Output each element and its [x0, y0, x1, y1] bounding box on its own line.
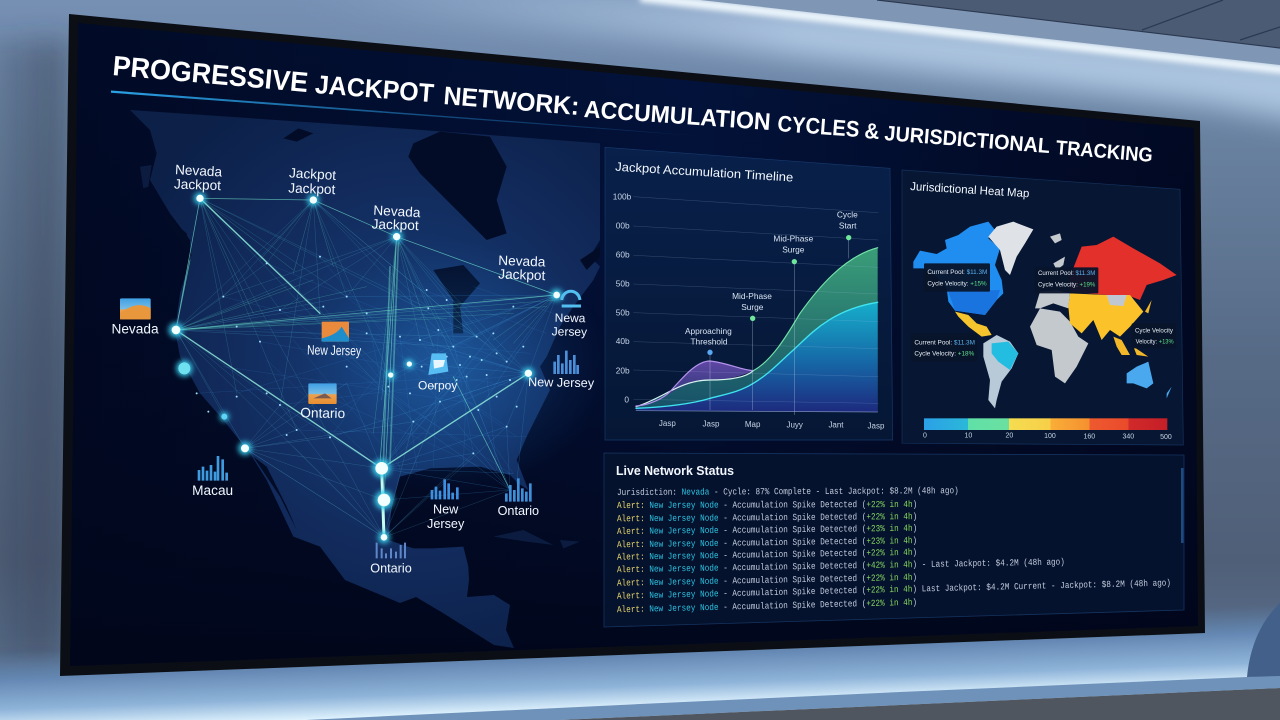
timeline x axis labels: Map: [745, 420, 761, 429]
map labels: Jersey: [427, 517, 465, 531]
tooltip: europe: Cycle Velocity: +19%: [1038, 282, 1095, 289]
tooltip: europe: Current Pool: $11.3M: [1038, 270, 1095, 277]
shelf ledge: [306, 675, 1280, 720]
timeline annotations: Surge: [782, 245, 805, 255]
timeline y axis labels: 20b: [616, 365, 630, 375]
status log lines: Jurisdiction: Nevada - Cycle: 87% Complete - Last Jackpot: $8.2M (48h ago): [617, 486, 959, 498]
map landmass: [130, 110, 600, 648]
panel: jurisdictional heat map: [902, 170, 1183, 445]
ceiling with panel seams: [700, 0, 1280, 65]
map labels: Newa: [555, 311, 586, 325]
map labels: Jersey: [552, 324, 587, 339]
map labels: Nevada: [111, 321, 159, 336]
tooltip: north america: [924, 263, 990, 292]
timeline y axis labels: 60b: [616, 250, 630, 260]
timeline annotations: Mid-Phase: [773, 234, 814, 244]
heat map legend labels: [923, 432, 1172, 441]
timeline annotations: Threshold: [690, 336, 728, 346]
title: &: [864, 118, 880, 144]
network connections: [176, 198, 557, 537]
map labels: New: [433, 502, 459, 516]
title: TRACKING: [1055, 137, 1154, 167]
status log lines: Alert: New Jersey Node - Accumulation Spike Detected (+23% in 4h): [617, 535, 917, 551]
tooltip: north america: Current Pool: $11.3M: [927, 269, 987, 276]
status scrollbar: [1181, 468, 1184, 543]
timeline areas: [636, 248, 878, 412]
status log lines: Alert: New Jersey Node - Accumulation Spike Detected (+22% in 4h) Last Jackpot: $4.2M Current - Jackpot: $8.2M (48h ago): [617, 578, 1171, 602]
status log lines: Alert: New Jersey Node - Accumulation Spike Detected (+23% in 4h): [617, 523, 917, 537]
timeline y axis labels: 40b: [616, 336, 630, 346]
timeline x axis labels: Jant: [828, 421, 844, 430]
screen background: [70, 23, 1198, 666]
timeline annotations: [685, 209, 858, 346]
heat map legend labels: 500: [1160, 434, 1172, 441]
heat map heading: Jurisdictional Heat Map: [910, 180, 1030, 200]
timeline y axis labels: 00b: [616, 221, 630, 231]
timeline gridlines: [633, 197, 878, 403]
network nodes: [169, 192, 563, 543]
status log lines: Alert: New Jersey Node - Accumulation Spike Detected (+42% in 4h) - Last Jackpot: $4.2M (48h ago): [617, 557, 1065, 576]
network small dots: [197, 257, 523, 453]
icon: bar chart New Jersey south: [432, 479, 457, 499]
icon: Ontario landscape: [308, 383, 337, 404]
tooltip: asia: Cycle Velocity: [1135, 328, 1174, 335]
heat map legend labels: 20: [1005, 433, 1013, 440]
timeline y axis labels: 50b: [616, 278, 630, 288]
status log lines: Alert: New Jersey Node - Accumulation Spike Detected (+22% in 4h): [617, 597, 917, 616]
icon: arch: [562, 291, 581, 306]
panel: network map: [111, 110, 607, 648]
map labels: Nevada: [175, 162, 223, 180]
title: [111, 50, 1154, 167]
title: PROGRESSIVE: [111, 50, 309, 98]
timeline curves: [636, 248, 878, 412]
tooltip: south america: [911, 333, 977, 362]
timeline annotations: Cycle: [837, 209, 858, 219]
tooltip: north america: Cycle Velocity: +15%: [927, 280, 987, 287]
timeline heading: Jackpot Accumulation Timeline: [615, 160, 794, 185]
map labels: New Jersey: [307, 343, 361, 358]
heat map legend labels: 100: [1044, 433, 1056, 440]
title: NETWORK:: [443, 82, 580, 121]
timeline panel background: [605, 147, 893, 440]
timeline x axis labels: Jasp: [659, 419, 676, 428]
map labels: New Jersey: [528, 375, 595, 390]
timeline y axis labels: [613, 191, 632, 405]
icon: Nevada landscape: [120, 298, 151, 319]
timeline annotations: Surge: [741, 302, 764, 312]
map labels: Ontario: [300, 405, 346, 421]
timeline annotations: Start: [839, 220, 857, 230]
map labels: Jackpot: [371, 217, 419, 233]
timeline annotations: Approaching: [685, 326, 732, 336]
map labels: Jackpot: [288, 181, 336, 197]
heat map legend labels: 0: [923, 432, 927, 439]
network glow: [300, 240, 607, 493]
timeline x axis labels: Jasp: [703, 420, 720, 429]
icon: central card: [428, 353, 448, 375]
title underline: [111, 90, 700, 136]
icon: bar chart Ontario south: [377, 543, 405, 558]
world map: [913, 222, 1177, 408]
map labels: Jackpot: [174, 177, 221, 193]
timeline annotations: Mid-Phase: [732, 291, 772, 301]
map coastal details: [160, 128, 600, 530]
timeline markers: [707, 235, 851, 415]
heat map legend labels: 10: [964, 432, 972, 439]
map labels: [111, 162, 595, 575]
timeline x axis labels: Jasp: [868, 422, 885, 431]
map labels: Ontario: [370, 561, 412, 575]
timeline x axis labels: Juyy: [786, 420, 803, 429]
timeline x axis labels: [659, 419, 885, 431]
tooltip: south america: Current Pool: $11.3M: [914, 339, 975, 346]
panel: accumulation timeline: [605, 147, 893, 440]
title: JACKPOT: [314, 69, 435, 108]
icon: bar chart Macau: [199, 456, 227, 481]
heat map panel background: [902, 170, 1183, 445]
tooltip: europe: [1035, 267, 1098, 293]
tooltip: asia: Velocity: +13%: [1136, 338, 1174, 345]
timeline y axis labels: 50b: [616, 307, 630, 317]
map labels: Oerpoy: [418, 378, 457, 392]
map labels: Macau: [192, 483, 233, 498]
timeline y axis labels: 100b: [613, 191, 632, 201]
tooltip: south america: Cycle Velocity: +18%: [914, 350, 974, 357]
icon: bar chart Ontario east: [506, 478, 530, 502]
icon: bar chart New Jersey east: [555, 351, 578, 374]
status log lines: Alert: New Jersey Node - Accumulation Spike Detected (+22% in 4h): [617, 547, 917, 563]
title: CYCLES: [777, 111, 860, 142]
status log lines: Alert: New Jersey Node - Accumulation Spike Detected (+22% in 4h): [617, 572, 917, 589]
status panel background: [604, 453, 1184, 627]
title: ACCUMULATION: [583, 96, 772, 136]
map labels: Nevada: [498, 253, 546, 269]
map labels: Nevada: [373, 203, 421, 220]
status log lines: Alert: New Jersey Node - Accumulation Spike Detected (+22% in 4h): [617, 511, 917, 525]
curved wall object bottom right: [1247, 603, 1280, 677]
icon: New Jersey landscape: [322, 322, 349, 342]
timeline y axis labels: 0: [624, 395, 629, 405]
tooltip: asia: [1132, 323, 1176, 348]
status log lines: [617, 486, 1171, 616]
status heading: Live Network Status: [616, 463, 734, 478]
map labels: Jackpot: [289, 165, 337, 183]
panel: live network status: [604, 453, 1184, 627]
map labels: Jackpot: [498, 267, 546, 283]
heat map legend labels: 340: [1123, 434, 1134, 441]
heat map legend labels: 160: [1084, 433, 1095, 440]
map offshore islands: [140, 165, 580, 548]
map labels: Ontario: [498, 504, 539, 518]
title: JURISDICTIONAL: [884, 122, 1051, 158]
heat map legend bar: [924, 418, 1167, 430]
status log lines: Alert: New Jersey Node - Accumulation Spike Detected (+22% in 4h): [617, 499, 917, 511]
